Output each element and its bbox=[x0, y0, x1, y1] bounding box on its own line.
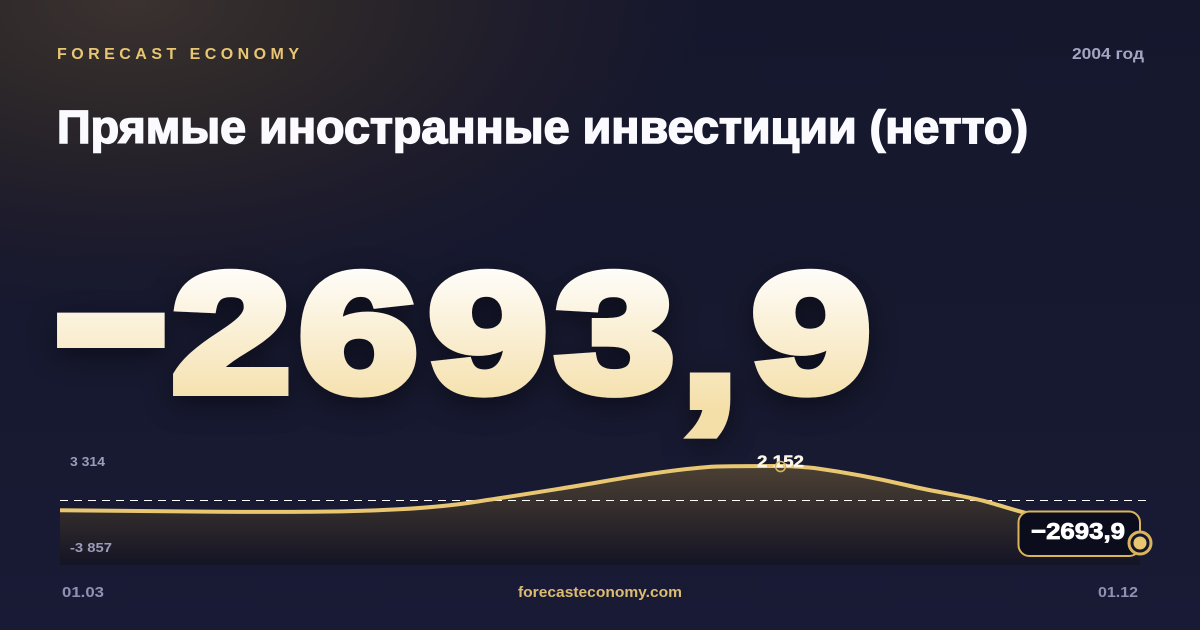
zero dashed line bbox=[60, 500, 1147, 502]
chart line bbox=[60, 466, 1140, 543]
current value callout: −2693,9 bbox=[1031, 518, 1125, 544]
peak marker bbox=[776, 462, 786, 472]
current value callout bbox=[1018, 512, 1140, 556]
main value: , bbox=[681, 237, 739, 445]
start date: 01.03 bbox=[62, 584, 104, 601]
current value marker bbox=[1129, 532, 1151, 554]
peak value: 2 152 bbox=[757, 452, 804, 471]
brand label: FORECAST ECONOMY bbox=[57, 46, 299, 63]
main value bbox=[40, 140, 871, 470]
end date: 01.12 bbox=[1098, 584, 1138, 601]
year label: 2004 год bbox=[1072, 46, 1144, 63]
main value: 9 bbox=[752, 239, 871, 427]
axis max label: 3 314 bbox=[70, 454, 106, 469]
main value: 2693 bbox=[172, 239, 674, 427]
chart bbox=[60, 452, 1151, 565]
area fill bbox=[60, 466, 1140, 565]
axis min label: -3 857 bbox=[70, 540, 112, 555]
title: Прямые иностранные инвестиции (нетто) bbox=[57, 101, 1028, 153]
main value: - bbox=[40, 140, 182, 470]
website: forecasteconomy.com bbox=[518, 584, 682, 601]
